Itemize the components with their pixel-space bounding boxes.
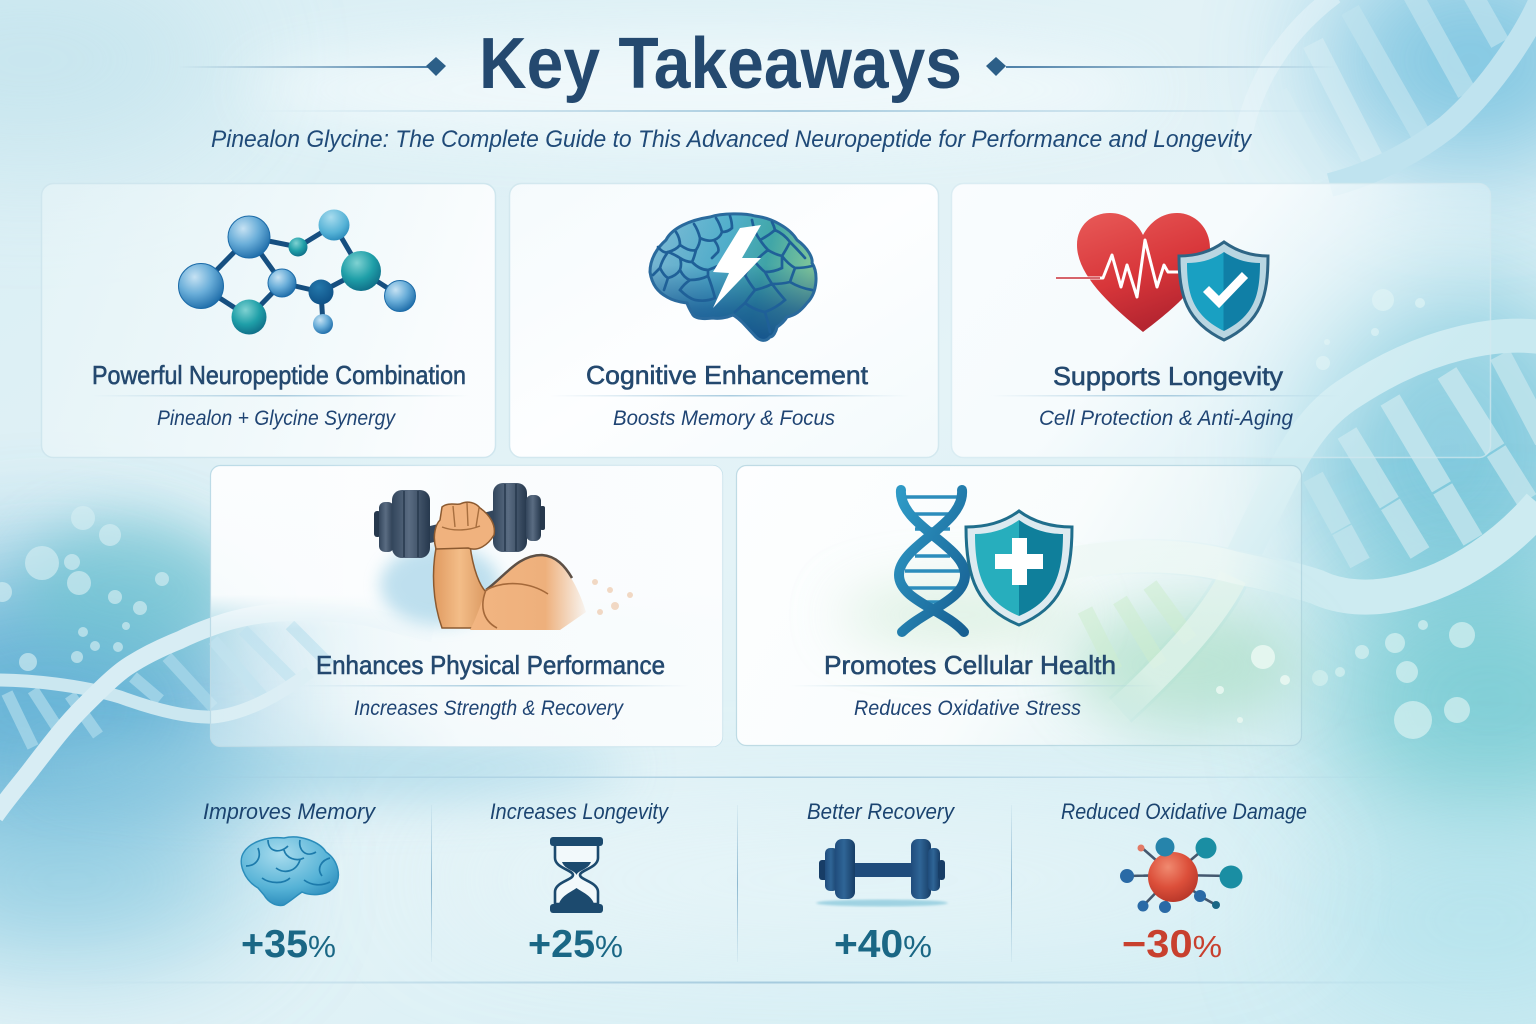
subheading: Cell Protection & Anti-Aging [1039,407,1293,430]
decorative helix in panel [1010,556,1290,715]
value: −30% [1122,923,1222,966]
icon: arm lifting dumbbell [374,483,633,630]
icon: dumbbell [816,839,948,906]
stats strip [60,776,1490,984]
label: Reduced Oxidative Damage [1061,799,1307,824]
title text: Key Takeaways [479,24,962,104]
title [178,24,1336,104]
label: Better Recovery [807,799,956,824]
icon: brain [241,837,338,905]
value: +35% [241,923,336,966]
panel: physical performance [210,466,722,746]
title ornament left [178,57,446,76]
background DNA helix top right [1240,0,1536,185]
subheading: Pinealon + Glycine Synergy [157,407,396,430]
icon: hourglass [550,837,603,913]
subheading: Increases Strength & Recovery [354,697,624,720]
label: Increases Longevity [490,799,670,824]
subtitle: Pinealon Glycine: The Complete Guide to This Advanced Neuropeptide for Performance and Longevity [211,126,1253,153]
heading: Powerful Neuropeptide Combination [92,360,466,390]
icon: DNA and shield [899,490,1072,632]
panel: cellular health [736,466,1302,746]
icon: molecule [178,210,416,334]
value: +40% [834,923,932,966]
stat: reduced oxidative damage [1061,799,1307,966]
bokeh right [1312,289,1475,739]
panel: supports longevity [952,184,1490,458]
panel: cognitive enhancement [510,184,938,458]
heading: Promotes Cellular Health [824,650,1116,680]
heading: Cognitive Enhancement [586,360,869,390]
icon: free radical [1120,838,1242,913]
background DNA helix right [1090,336,1536,710]
stat: better recovery [807,799,956,966]
value: +25% [528,923,623,966]
subheading: Boosts Memory & Focus [613,407,835,430]
icon: heart and shield [1056,213,1268,340]
heading: Supports Longevity [1053,361,1283,391]
subheading: Reduces Oxidative Stress [854,697,1081,720]
heading: Enhances Physical Performance [316,650,665,680]
background DNA helix left [0,612,433,816]
bokeh left [0,506,169,671]
title ornament right [986,57,1336,76]
label: Improves Memory [203,799,377,824]
icon: brain with lightning [650,214,816,340]
panel: neuropeptide combination [42,184,496,458]
stat: improves memory [203,799,377,966]
stat: increases longevity [490,799,670,966]
